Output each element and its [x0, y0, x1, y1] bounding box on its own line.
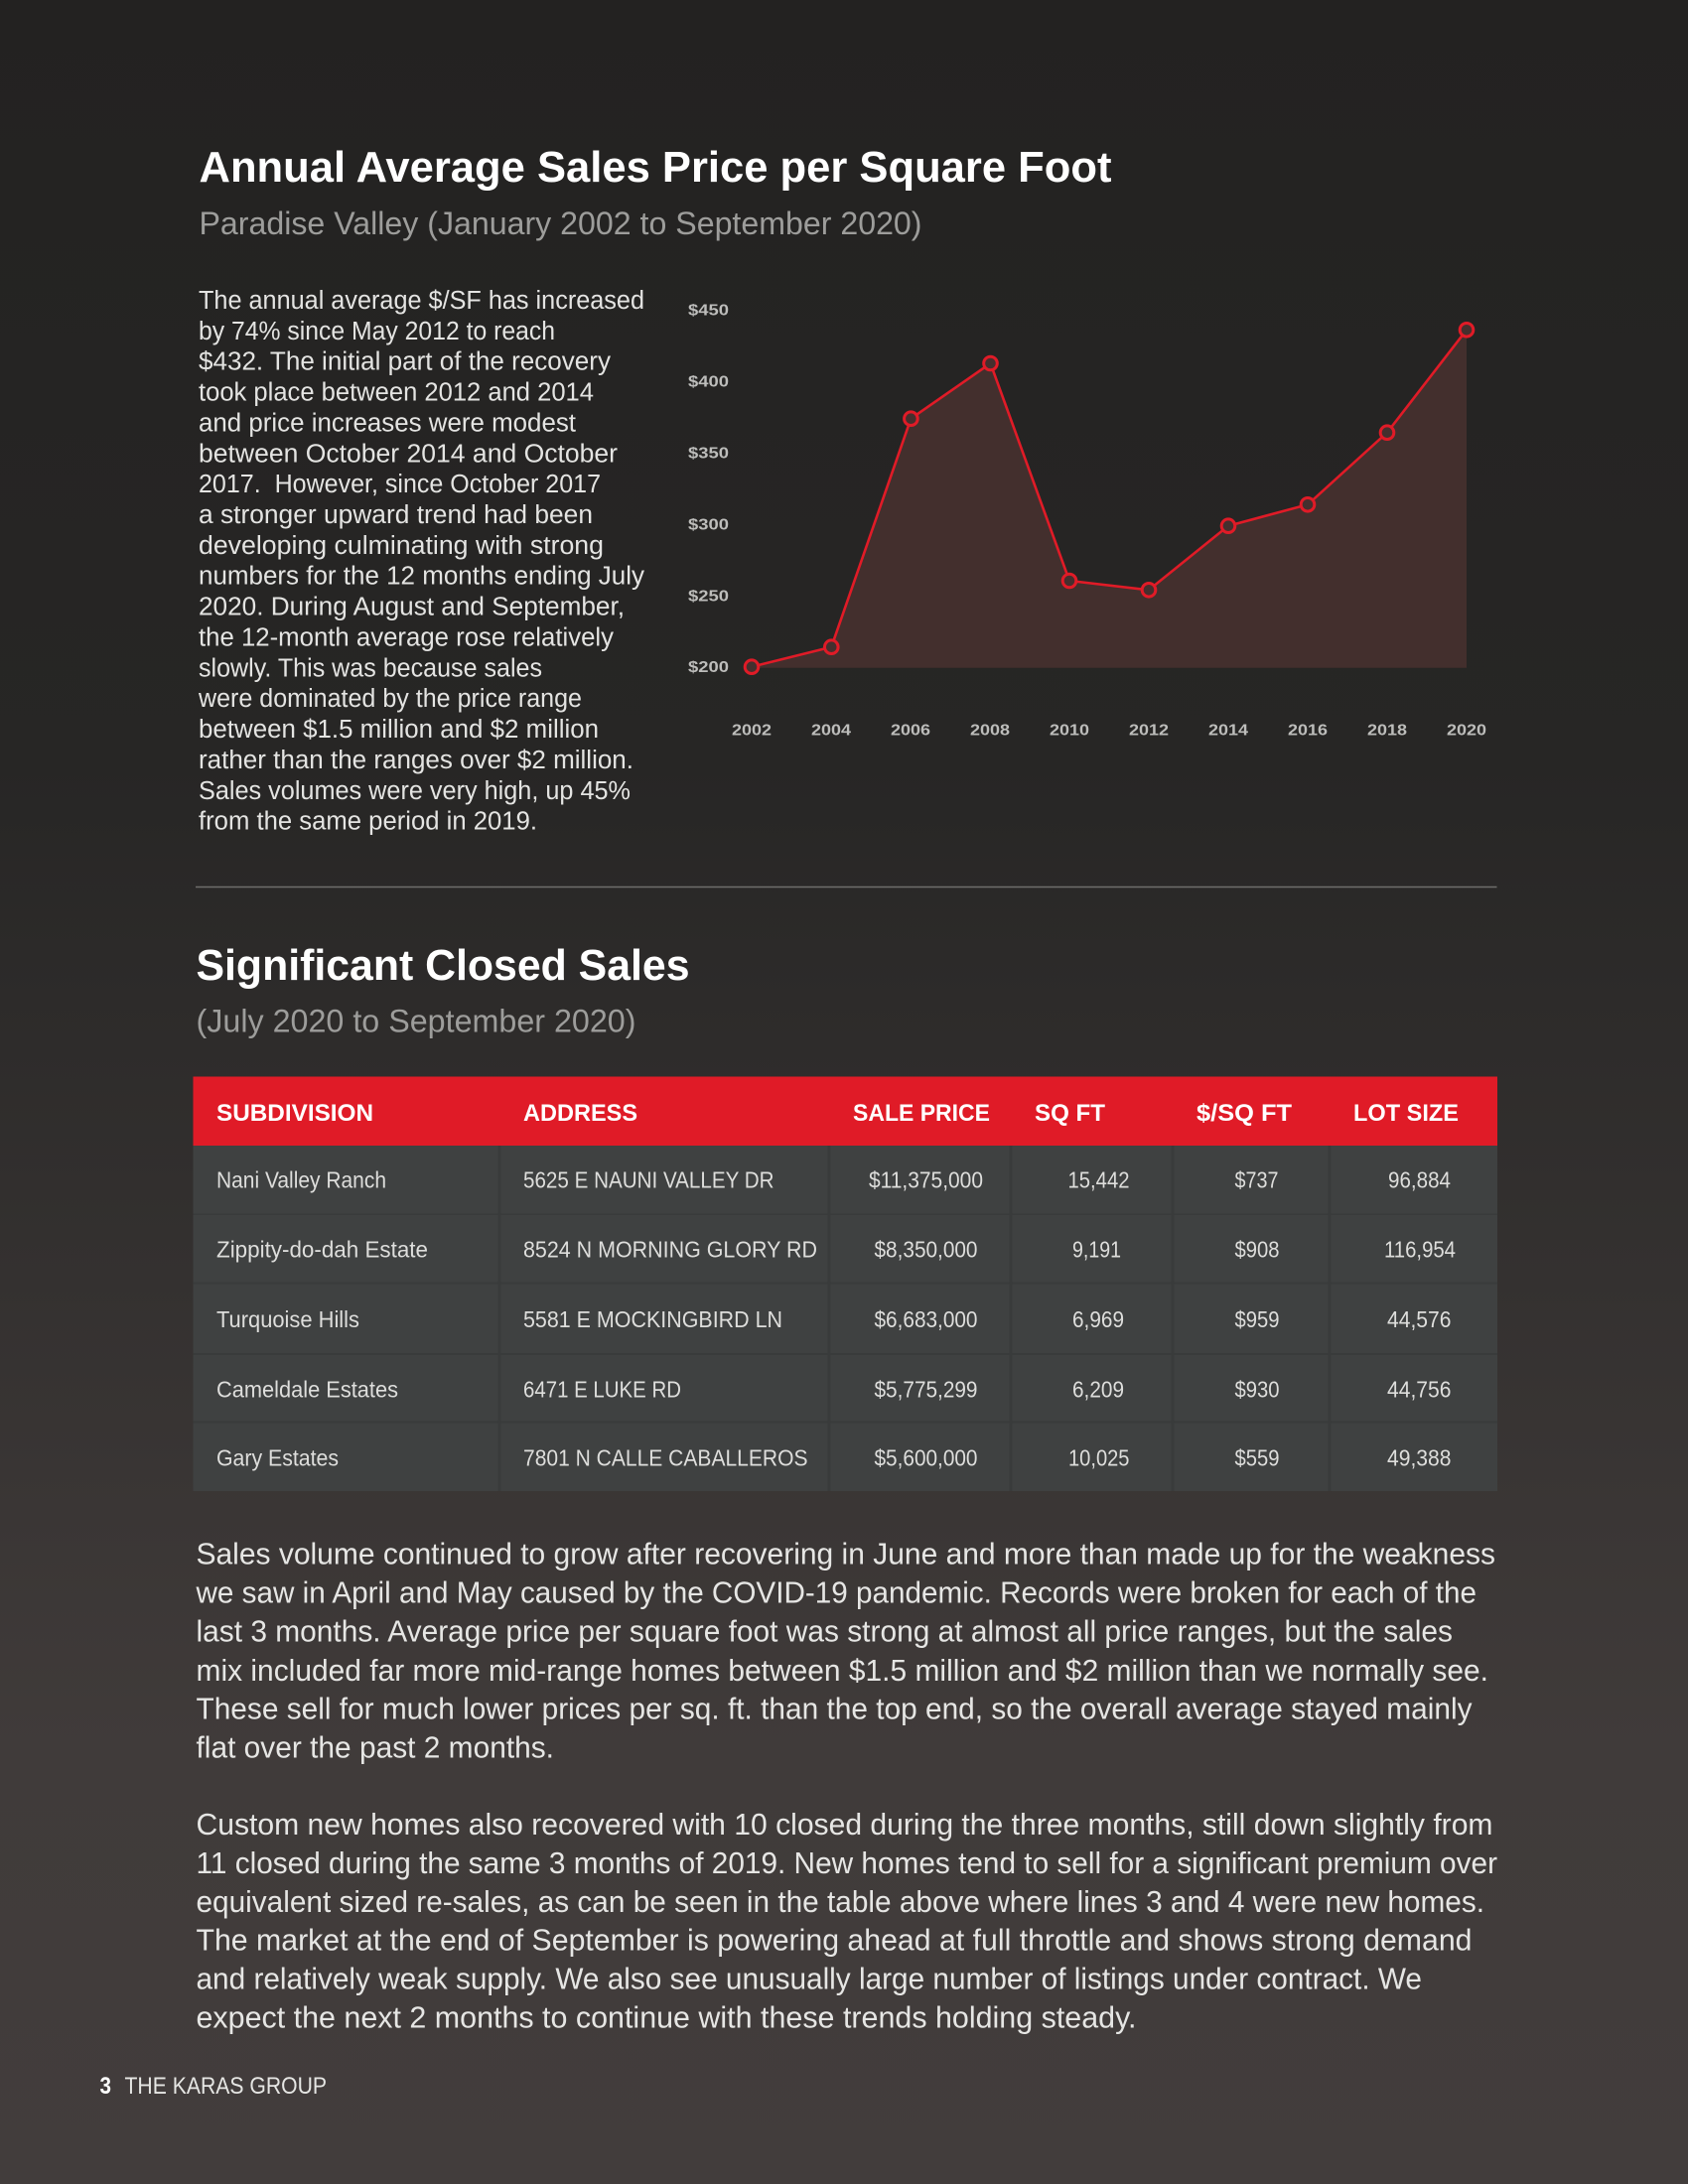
title: annual average sales price: Annual Average Sales Price per Square Foot	[199, 143, 1112, 192]
text block: price per square foot commentary: by 74% since May 2012 to reach	[199, 318, 555, 345]
table row: Turquoise Hills: 6,969	[1072, 1306, 1124, 1332]
table row: Cameldale Estates: $5,775,299	[874, 1376, 977, 1402]
area chart: average price per square foot 2002-2020	[688, 302, 1486, 739]
x axis labels: 2014	[1208, 723, 1248, 739]
table header row: SALE PRICE	[853, 1100, 990, 1127]
text block: price per square foot commentary: rather than the ranges over $2 million.	[199, 747, 633, 774]
y axis labels: $300	[688, 516, 729, 534]
x axis labels: 2020	[1447, 723, 1486, 739]
table row: Nani Valley Ranch: $737	[1235, 1167, 1279, 1193]
text block: price per square foot commentary: slowly. This was because sales	[199, 654, 542, 682]
table row: Cameldale Estates: 44,756	[1387, 1376, 1452, 1402]
table row: Zippity-do-dah Estate: 8524 N MORNING GLORY RD	[523, 1237, 817, 1263]
text block: sales volume commentary: last 3 months. Average price per square foot was strong at almost all price ranges, but the sales	[197, 1614, 1453, 1648]
x axis labels	[732, 723, 1486, 739]
table row: Nani Valley Ranch: 96,884	[1388, 1167, 1451, 1193]
text block: price per square foot commentary: between $1.5 million and $2 million	[199, 716, 599, 744]
table row: Turquoise Hills: $959	[1235, 1306, 1279, 1332]
table row: Gary Estates: 10,025	[1068, 1445, 1130, 1471]
table: significant closed sales	[193, 1076, 1497, 1491]
table row: Gary Estates: Gary Estates	[216, 1445, 339, 1471]
table header row: SQ FT	[1035, 1100, 1105, 1127]
x axis labels: 2008	[970, 723, 1010, 739]
table row: Cameldale Estates: 6471 E LUKE RD	[523, 1376, 681, 1402]
table row: Nani Valley Ranch	[193, 1146, 1497, 1213]
table row: Cameldale Estates: Cameldale Estates	[216, 1376, 398, 1402]
text block: price per square foot commentary: 2017. However, since October 2017	[199, 471, 601, 498]
table row: Cameldale Estates: 6,209	[1072, 1376, 1124, 1402]
text block: price per square foot commentary: from the same period in 2019.	[199, 808, 537, 836]
table row: Gary Estates: $559	[1235, 1445, 1279, 1471]
text block: price per square foot commentary: 2020. During August and September,	[199, 594, 625, 621]
table row: Cameldale Estates	[193, 1355, 1497, 1422]
text block: price per square foot commentary: a stronger upward trend had been	[199, 501, 593, 529]
text block: sales volume commentary: flat over the past 2 months.	[197, 1729, 554, 1765]
text block: custom new homes commentary: 11 closed during the same 3 months of 2019. New homes tend to sell for a significant premium over	[197, 1845, 1497, 1880]
text block: sales volume commentary: we saw in April and May caused by the COVID-19 pandemic. Records were broken for each of the	[196, 1574, 1477, 1610]
table row: Zippity-do-dah Estate: $8,350,000	[874, 1237, 977, 1263]
table header row: $/SQ FT	[1196, 1100, 1292, 1127]
text block: price per square foot commentary: developing culminating with strong	[199, 532, 604, 560]
text block: sales volume commentary: These sell for much lower prices per sq. ft. than the top end, so the overall average stayed mainly	[197, 1692, 1473, 1725]
text block: price per square foot commentary: numbers for the 12 months ending July	[199, 563, 644, 591]
x axis labels: 2004	[811, 723, 851, 739]
table row: Zippity-do-dah Estate: $908	[1235, 1237, 1279, 1263]
table row: Nani Valley Ranch: Nani Valley Ranch	[216, 1167, 386, 1193]
data point markers	[745, 324, 1474, 673]
text block: price per square foot commentary: and price increases were modest	[199, 409, 576, 437]
table row: Zippity-do-dah Estate: 116,954	[1384, 1237, 1456, 1263]
table header row	[193, 1076, 1497, 1146]
footer: page number and company name: THE KARAS GROUP	[125, 2073, 327, 2100]
text block: price per square foot commentary: were dominated by the price range	[198, 685, 582, 713]
table row: Gary Estates	[193, 1424, 1497, 1491]
subtitle: closed sales date range: (July 2020 to September 2020)	[197, 1003, 635, 1038]
table row: Gary Estates: 7801 N CALLE CABALLEROS	[523, 1445, 808, 1471]
x axis labels: 2002	[732, 723, 772, 739]
text block: sales volume commentary	[196, 1537, 1495, 1765]
table row: Zippity-do-dah Estate: Zippity-do-dah Estate	[216, 1237, 428, 1263]
table row: Turquoise Hills: 5581 E MOCKINGBIRD LN	[523, 1306, 782, 1332]
text block: price per square foot commentary	[198, 287, 644, 836]
table row: Zippity-do-dah Estate: 9,191	[1072, 1237, 1121, 1263]
y axis labels: $250	[688, 588, 729, 606]
x axis labels: 2006	[891, 723, 930, 739]
table row: Nani Valley Ranch: $11,375,000	[869, 1167, 983, 1193]
area fill	[752, 330, 1467, 668]
table row: Zippity-do-dah Estate	[193, 1215, 1497, 1283]
y axis labels: $350	[688, 445, 729, 463]
text block: custom new homes commentary: expect the next 2 months to continue with these trends holding steady.	[197, 1999, 1136, 2035]
text block: price per square foot commentary: the 12-month average rose relatively	[199, 623, 614, 651]
y axis labels	[688, 302, 729, 676]
text block: custom new homes commentary: Custom new homes also recovered with 10 closed during the three months, still down slightly from	[197, 1807, 1493, 1842]
text block: price per square foot commentary: $432. The initial part of the recovery	[199, 348, 611, 376]
table header row: SUBDIVISION	[216, 1100, 373, 1127]
table row: Gary Estates: 49,388	[1387, 1445, 1452, 1471]
table row: Cameldale Estates: $930	[1235, 1376, 1279, 1402]
x axis labels: 2016	[1288, 723, 1328, 739]
y axis labels: $450	[688, 302, 729, 320]
table row: Turquoise Hills: Turquoise Hills	[216, 1306, 359, 1332]
x axis labels: 2012	[1129, 723, 1169, 739]
table header row: ADDRESS	[523, 1100, 637, 1127]
price line	[752, 330, 1467, 667]
text block: custom new homes commentary	[197, 1807, 1497, 2035]
table row: Nani Valley Ranch: 5625 E NAUNI VALLEY DR	[523, 1167, 774, 1193]
text block: price per square foot commentary: took place between 2012 and 2014	[199, 379, 594, 407]
table row: Turquoise Hills	[193, 1285, 1497, 1353]
text block: custom new homes commentary: and relatively weak supply. We also see unusually large number of listings under contract. We	[197, 1962, 1422, 1995]
table row: Turquoise Hills: 44,576	[1387, 1306, 1452, 1332]
text block: price per square foot commentary: Sales volumes were very high, up 45%	[199, 777, 631, 805]
table row: Turquoise Hills: $6,683,000	[874, 1306, 977, 1332]
table row: Gary Estates: $5,600,000	[874, 1445, 977, 1471]
text block: sales volume commentary: mix included far more mid-range homes between $1.5 million and $2 million than we normally see.	[197, 1653, 1488, 1688]
y axis labels: $400	[688, 373, 729, 391]
table row: Nani Valley Ranch: 15,442	[1068, 1167, 1130, 1193]
text block: sales volume commentary: Sales volume continued to grow after recovering in June and more than made up for the weakness	[197, 1537, 1495, 1570]
text block: price per square foot commentary: The annual average $/SF has increased	[199, 287, 644, 315]
text block: custom new homes commentary: The market at the end of September is powering ahead at full throttle and shows strong demand	[197, 1922, 1472, 1958]
text block: custom new homes commentary: equivalent sized re-sales, as can be seen in the table above where lines 3 and 4 were new homes.	[197, 1884, 1484, 1919]
x axis labels: 2010	[1050, 723, 1089, 739]
subtitle: paradise valley date range: Paradise Valley (January 2002 to September 2020)	[199, 205, 921, 241]
x axis labels: 2018	[1367, 723, 1407, 739]
table header row: LOT SIZE	[1353, 1100, 1459, 1127]
heading: significant closed sales: Significant Closed Sales	[197, 941, 689, 990]
y axis labels: $200	[688, 659, 729, 676]
footer: page number and company name: 3	[99, 2073, 111, 2100]
text block: price per square foot commentary: between October 2014 and October	[199, 440, 619, 468]
